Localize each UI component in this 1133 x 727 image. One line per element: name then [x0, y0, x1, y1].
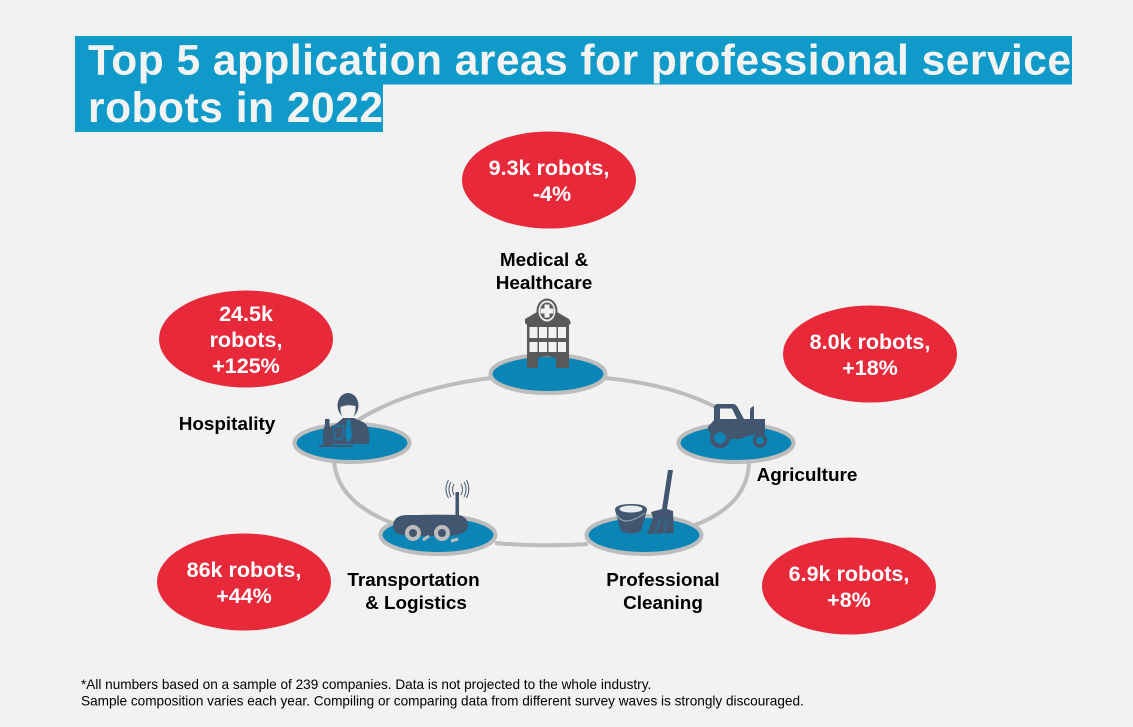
footnote: Sample composition varies each year. Compiling or comparing data from different survey waves is strongly discouraged.	[81, 694, 804, 708]
icon: tractor	[708, 404, 766, 446]
callout: hospitality 24.5k robots	[159, 290, 333, 388]
icon: delivery robot	[393, 480, 469, 541]
icon: bucket and mop	[615, 470, 674, 534]
callout: agriculture 8.0k robots	[783, 306, 957, 402]
label: transportation and logistics: & Logistics	[365, 593, 467, 614]
callout: medical 9.3k robots: -4%	[533, 182, 571, 206]
label: transportation and logistics: Transportation	[347, 570, 480, 591]
icon: waiter with bottle	[319, 393, 369, 447]
callout: cleaning 6.9k robots: 6.9k robots,	[789, 562, 909, 586]
icon: hospital	[525, 298, 571, 368]
platform: agriculture	[678, 424, 794, 462]
platform: professional cleaning	[586, 516, 702, 554]
callout: agriculture 8.0k robots: 8.0k robots,	[810, 330, 930, 354]
callout: transportation 86k robots: 86k robots,	[187, 558, 301, 582]
label: professional cleaning: Professional	[606, 570, 720, 591]
callout: medical 9.3k robots	[462, 132, 636, 228]
title: robots in 2022	[88, 85, 383, 132]
callout: transportation 86k robots: +44%	[216, 584, 272, 608]
callout: hospitality 24.5k robots: +125%	[212, 354, 280, 378]
callout: agriculture 8.0k robots: +18%	[842, 356, 898, 380]
callout: hospitality 24.5k robots: 24.5k	[219, 302, 273, 326]
label: medical and healthcare: Medical &	[500, 250, 588, 271]
label: agriculture: Agriculture	[757, 465, 857, 486]
callout: transportation 86k robots	[157, 534, 331, 630]
platform: hospitality	[294, 424, 410, 462]
callout: medical 9.3k robots: 9.3k robots,	[489, 156, 609, 180]
platform: medical	[490, 355, 606, 393]
platform: transportation	[380, 516, 496, 554]
title: Top 5 application areas for professional service	[88, 38, 1071, 84]
callout: cleaning 6.9k robots: +8%	[827, 588, 871, 612]
label: professional cleaning: Cleaning	[623, 593, 703, 614]
ring connecting the five application areas	[334, 378, 749, 545]
label: medical and healthcare: Healthcare	[496, 273, 592, 294]
label: hospitality: Hospitality	[179, 414, 276, 435]
footnote: *All numbers based on a sample of 239 companies. Data is not projected to the whole industry.	[81, 677, 651, 692]
callout: hospitality 24.5k robots: robots,	[210, 328, 282, 352]
callout: cleaning 6.9k robots	[762, 538, 936, 634]
title	[75, 36, 1072, 132]
